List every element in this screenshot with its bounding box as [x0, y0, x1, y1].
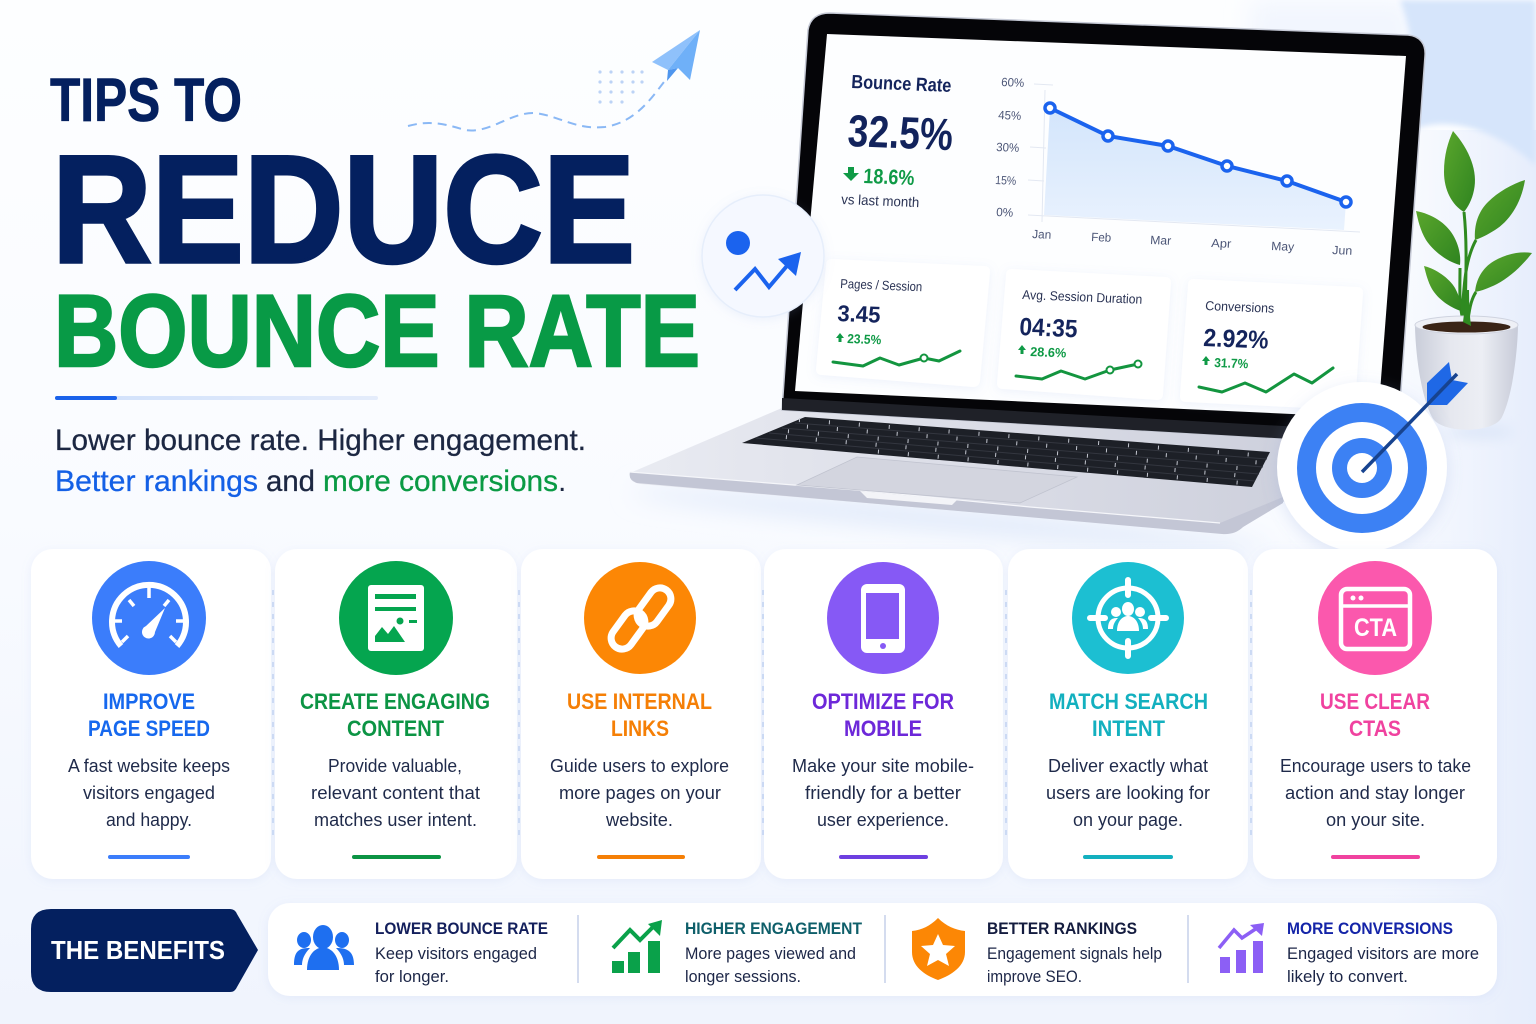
icon: speedometer — [92, 561, 206, 675]
heading: MATCH SEARCH — [1049, 689, 1208, 714]
touchpad — [797, 457, 1077, 503]
subtitle: and — [266, 465, 315, 498]
laptop front edge — [630, 472, 1283, 534]
line chart: bounce rate by month: Jun — [1332, 243, 1353, 258]
panel: bounce rate summary — [841, 72, 954, 210]
benefit: lower bounce rate: Keep visitors engaged — [375, 945, 537, 963]
line chart: bounce rate by month: 0% — [996, 205, 1014, 220]
benefit: higher engagement: HIGHER ENGAGEMENT — [685, 920, 862, 938]
benefit: better rankings: improve SEO. — [987, 968, 1082, 986]
heading: INTENT — [1092, 716, 1166, 741]
benefit: better rankings: BETTER RANKINGS — [987, 920, 1137, 938]
panel: tips cards — [31, 549, 1497, 879]
description: website. — [605, 810, 673, 830]
line chart: bounce rate by month: May — [1271, 239, 1295, 254]
heading: LINKS — [611, 716, 669, 741]
line chart: bounce rate by month — [995, 75, 1360, 258]
line chart: bounce rate by month: Jan — [1032, 227, 1052, 242]
icon: cta window — [1318, 561, 1432, 675]
panel: bounce rate summary: 18.6% — [863, 165, 915, 190]
heading: USE CLEAR — [1320, 689, 1430, 714]
description — [68, 756, 230, 830]
heading: CONTENT — [347, 716, 445, 741]
line chart: bounce rate by month: 60% — [1001, 75, 1025, 90]
heading: CREATE ENGAGING — [300, 689, 490, 714]
heading — [88, 689, 210, 741]
description: action and stay longer — [1285, 783, 1465, 803]
description: A fast website keeps — [68, 756, 230, 776]
description — [792, 756, 974, 830]
stems — [1460, 212, 1476, 327]
icon: green growth chart — [612, 920, 662, 973]
description — [1046, 756, 1210, 830]
line chart: bounce rate by month: 45% — [998, 108, 1022, 123]
hinge — [782, 398, 1397, 445]
keyboard — [742, 417, 1270, 487]
icon: chain link — [584, 562, 696, 674]
screen — [795, 34, 1406, 418]
laptop — [630, 13, 1425, 534]
benefit: more conversions: likely to convert. — [1287, 968, 1408, 986]
icon: people — [294, 925, 354, 970]
benefit: higher engagement: longer sessions. — [685, 968, 801, 986]
dashed separators — [273, 590, 1251, 840]
description: and happy. — [106, 810, 192, 830]
description: Deliver exactly what — [1048, 756, 1208, 776]
icon: shield star — [912, 918, 965, 980]
leaves — [1416, 131, 1532, 311]
line chart: bounce rate by month: Mar — [1150, 233, 1172, 248]
benefit: higher engagement — [612, 920, 862, 986]
panel: pages per session: Pages / Session — [840, 276, 923, 294]
panel: average session duration: 04:35 — [1019, 313, 1078, 343]
description: Encourage users to take — [1280, 756, 1471, 776]
heading: IMPROVE — [103, 689, 195, 714]
panel: average session duration — [997, 269, 1171, 400]
benefit: more conversions: MORE CONVERSIONS — [1287, 920, 1453, 938]
description: matches user intent. — [314, 810, 477, 830]
line chart: bounce rate by month: 15% — [995, 173, 1017, 188]
icon: target with dart — [1277, 362, 1468, 552]
heading — [300, 689, 490, 741]
subtitle: . — [558, 465, 566, 498]
heading: MOBILE — [844, 716, 922, 741]
benefit: lower bounce rate: LOWER BOUNCE RATE — [375, 920, 548, 938]
line chart: bounce rate by month: Apr — [1211, 236, 1232, 251]
description: on your page. — [1073, 810, 1183, 830]
subtitle — [55, 424, 586, 498]
icon: down arrow — [843, 167, 859, 181]
panel: pages per session: 3.45 — [837, 300, 881, 328]
panel: benefits bar — [268, 903, 1497, 996]
plant in pot — [1415, 131, 1532, 430]
heading — [1320, 689, 1430, 741]
benefit: better rankings: Engagement signals help — [987, 945, 1162, 963]
pot — [1415, 325, 1518, 430]
icon: paper plane with dashed trail — [408, 30, 700, 130]
benefit: better rankings — [912, 918, 1162, 986]
laptop lid — [782, 13, 1425, 445]
card: improve page speed — [31, 549, 271, 879]
benefit: higher engagement: More pages viewed and — [685, 945, 856, 963]
card: match search intent — [1008, 549, 1248, 879]
heading: USE INTERNAL — [567, 689, 712, 714]
panel: conversions: 31.7% — [1214, 355, 1249, 371]
icon: growth badge — [702, 195, 824, 317]
panel: bounce rate summary: Bounce Rate — [851, 72, 952, 97]
description — [311, 756, 480, 830]
panel: conversions — [1180, 279, 1363, 410]
description: Guide users to explore — [550, 756, 729, 776]
description: Provide valuable, — [328, 756, 462, 776]
icon: audience target — [1072, 562, 1184, 674]
title — [50, 66, 700, 388]
description: more pages on your — [559, 783, 721, 803]
panel: pages per session: 23.5% — [847, 331, 882, 347]
benefit: lower bounce rate — [294, 920, 548, 986]
panel: average session duration: Avg. Session Duration — [1022, 287, 1143, 307]
icon: purple growth chart — [1219, 923, 1264, 973]
subtitle: Lower bounce rate. Higher engagement. — [55, 424, 586, 457]
icon: cta window: CTA — [1354, 614, 1397, 642]
line chart: bounce rate by month: 30% — [996, 140, 1020, 155]
benefit: more conversions — [1219, 920, 1479, 986]
description — [550, 756, 729, 830]
heading — [567, 689, 712, 741]
description: user experience. — [817, 810, 949, 830]
laptop base — [630, 408, 1400, 533]
subtitle: more conversions — [323, 465, 558, 498]
description: relevant content that — [311, 783, 480, 803]
benefit: more conversions: Engaged visitors are more — [1287, 945, 1479, 963]
heading: OPTIMIZE FOR — [812, 689, 954, 714]
panel: average session duration: 28.6% — [1030, 344, 1067, 360]
description — [1280, 756, 1471, 830]
title line: tips to: TIPS TO — [50, 66, 242, 134]
panel: pages per session — [816, 259, 990, 387]
description: friendly for a better — [805, 783, 961, 803]
subtitle: Better rankings — [55, 465, 258, 498]
panel: conversions: 2.92% — [1203, 324, 1269, 355]
title underline — [55, 396, 378, 400]
panel: bounce rate summary: 32.5% — [846, 105, 954, 160]
heading: PAGE SPEED — [88, 716, 210, 741]
icon: document — [339, 561, 453, 675]
notch — [860, 491, 957, 505]
heading: CTAS — [1349, 716, 1401, 741]
description: on your site. — [1326, 810, 1425, 830]
card: create engaging content — [275, 549, 517, 879]
description: visitors engaged — [83, 783, 215, 803]
title line: bounce rate: BOUNCE RATE — [54, 274, 700, 388]
badge: the benefits — [31, 909, 258, 992]
panel: bounce rate summary: vs last month — [841, 191, 920, 210]
icon: phone — [827, 562, 939, 674]
title line: reduce: REDUCE — [52, 124, 635, 295]
panel: conversions: Conversions — [1205, 298, 1275, 316]
benefit: lower bounce rate: for longer. — [375, 968, 449, 986]
heading — [812, 689, 954, 741]
description: users are looking for — [1046, 783, 1210, 803]
heading — [1049, 689, 1208, 741]
line chart: bounce rate by month: Feb — [1091, 230, 1112, 245]
card: use clear ctas — [1253, 549, 1497, 879]
card: use internal links — [521, 549, 761, 879]
description: Make your site mobile- — [792, 756, 974, 776]
badge: the benefits: THE BENEFITS — [51, 935, 225, 965]
card: optimize for mobile — [764, 549, 1003, 879]
